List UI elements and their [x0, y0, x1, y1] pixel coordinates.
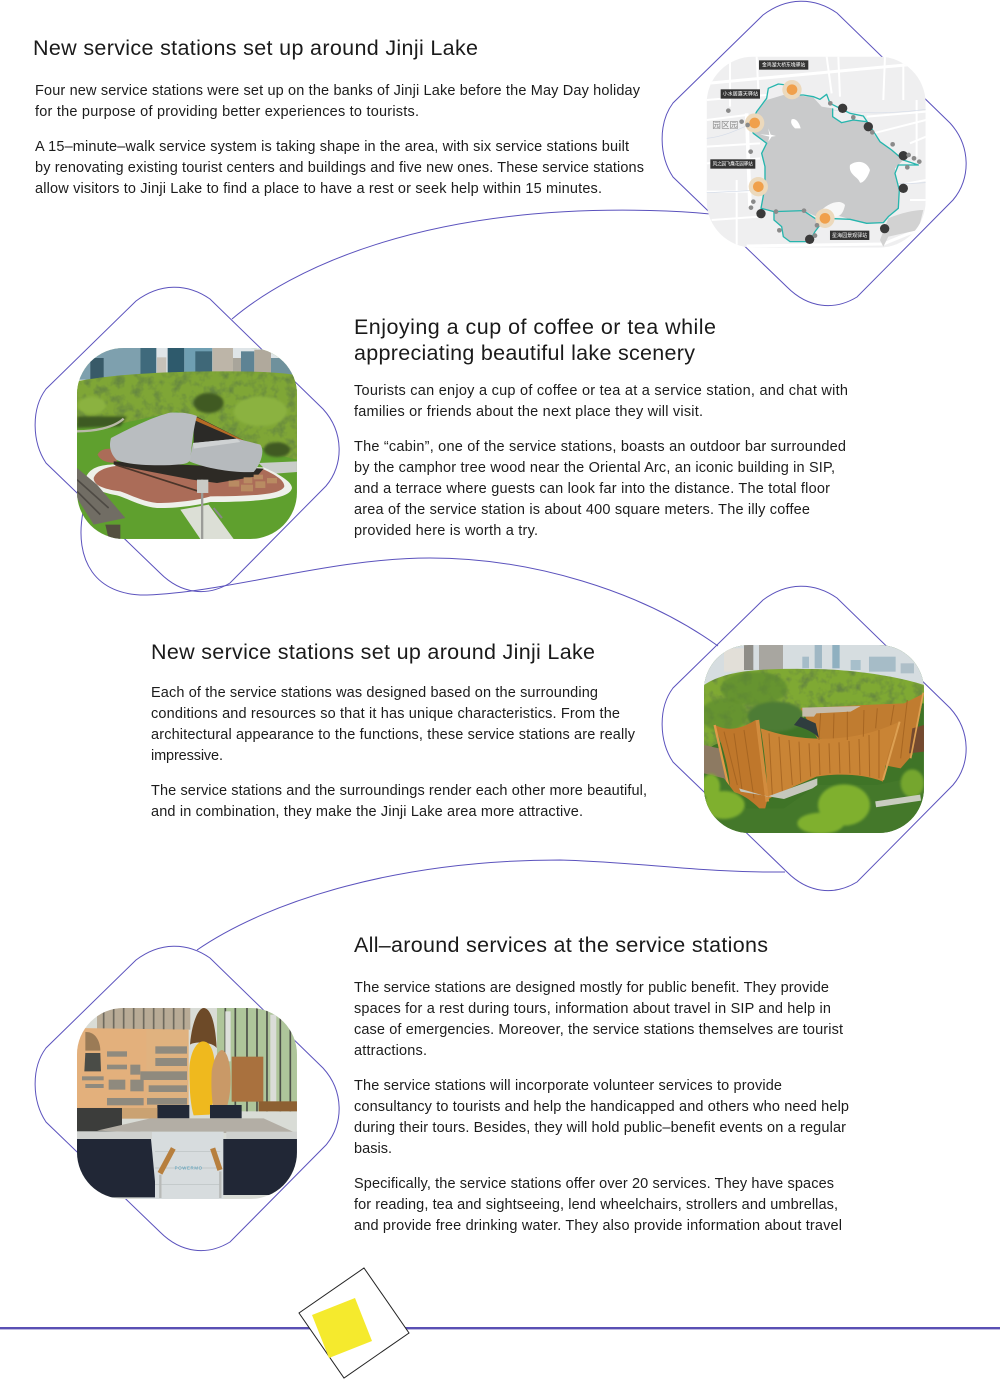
connector curve: cabin to bamboo pavilion: [81, 512, 718, 646]
foreground greens: [701, 769, 924, 834]
footer emblem: tilted square with yellow square: [299, 1268, 409, 1378]
paragraph: [354, 980, 843, 1059]
paragraph: [354, 439, 846, 539]
outline: shop diamond: [35, 946, 339, 1251]
panel: shop interior photo: [77, 1008, 297, 1199]
station labels: 小水居露天驿站: [723, 91, 758, 98]
paragraph: [35, 83, 641, 120]
station labels: 星海园景观驿站: [832, 232, 867, 239]
panel: route map of Jinji Lake: [707, 57, 926, 248]
paragraph: conditions and resources so that it has unique characteristics. From the: [151, 706, 620, 722]
paragraph: basis.: [354, 1141, 392, 1157]
sky and skyline: [704, 645, 924, 685]
paragraph: by the camphor tree wood near the Oriental Arc, an iconic building in SIP,: [354, 460, 835, 476]
heading: appreciating beautiful lake scenery: [354, 341, 695, 365]
back chairs: [157, 1105, 189, 1118]
section 1: map text: [33, 36, 644, 197]
outline: cabin diamond: [35, 287, 339, 592]
paragraph: [35, 139, 644, 197]
paragraph: The service stations are designed mostly for public benefit. They provide: [354, 980, 829, 996]
teal route: [750, 84, 918, 242]
panel: route map of Jinji Lake: 园区园: [712, 120, 738, 130]
paragraph: A 15–minute–walk service system is taking shape in the area, with six service stations built: [35, 139, 629, 155]
section 4: services text: [354, 933, 849, 1234]
paragraph: The service stations and the surroundings render each other more beautiful,: [151, 783, 647, 799]
surfboards: [189, 1008, 263, 1115]
paragraph: Four new service stations were set up on the banks of Jinji Lake before the May Day holiday: [35, 83, 641, 99]
pergola: [77, 468, 125, 525]
paragraph: [354, 1078, 849, 1157]
panel: shop interior photo: POWERMO: [175, 1165, 203, 1170]
paragraph: Each of the service stations was designed based on the surrounding: [151, 685, 598, 701]
canopy: [701, 669, 924, 752]
connector curve: bamboo pavilion to shop: [197, 860, 785, 950]
panel: bamboo pavilion photo: [701, 645, 924, 834]
paragraph: consultancy to tourists and help the handicapped and others who need help: [354, 1099, 849, 1115]
station labels: 金鸡湖大桥东堍驿站: [762, 62, 805, 69]
lake surface: [750, 95, 903, 223]
back building: [801, 693, 924, 768]
paragraph: [151, 685, 636, 764]
paragraph: during their tours. Besides, they will hold public–benefit events on a regular: [354, 1120, 846, 1136]
paragraph: [354, 1176, 842, 1234]
window slats: [97, 1008, 297, 1111]
paragraph: for the purpose of providing better experiences to tourists.: [35, 104, 419, 120]
paragraph: for reading, tea and sightseeing, lend wheelchairs, strollers and umbrellas,: [354, 1197, 838, 1213]
paragraph: by renovating existing tourist centers and buildings and five new ones. These service stations: [35, 160, 644, 176]
paragraph: impressive.: [151, 748, 223, 764]
heading: New service stations set up around Jinji Lake: [151, 640, 595, 664]
front bamboo screens: [715, 720, 767, 813]
connector curve: map to cabin: [232, 210, 710, 319]
paragraph: families or friends about the next place they will visit.: [354, 404, 703, 420]
station labels: 风之园飞鹰花园驿站: [713, 161, 753, 168]
outline: map diamond: [662, 1, 966, 306]
paragraph: The “cabin”, one of the service stations, boasts an outdoor bar surrounded: [354, 439, 846, 455]
paragraph: Specifically, the service stations offer over 20 services. They have spaces: [354, 1176, 834, 1192]
left ground: [704, 745, 726, 782]
section 3: design text: [151, 640, 647, 820]
tree canopy: [77, 371, 297, 460]
paragraph: architectural appearance to the functions, these service stations are really: [151, 727, 636, 743]
footer rule: [0, 1327, 1000, 1329]
paragraph: spaces for a rest during tours, information about travel in SIP and help in: [354, 1001, 831, 1017]
paragraph: case of emergencies. Moreover, the service stations themselves are tourist: [354, 1022, 843, 1038]
paragraph: [354, 383, 848, 420]
heading: All–around services at the service stations: [354, 933, 768, 957]
cabin roof: [194, 416, 247, 443]
sky and towers: [77, 348, 297, 381]
paragraph: and a terrace where guests can look far into the distance. The total floor: [354, 481, 830, 497]
station labels: [710, 60, 869, 240]
pegboard wall: [77, 1028, 189, 1116]
paragraph: Tourists can enjoy a cup of coffee or tea at a service station, and chat with: [354, 383, 848, 399]
pavement under pavilion: [739, 778, 817, 799]
panel: cabin photo: [77, 348, 297, 539]
paragraph: and in combination, they make the Jinji Lake area more attractive.: [151, 804, 583, 820]
heading: Enjoying a cup of coffee or tea while: [354, 315, 716, 339]
section 2: coffee text: [354, 315, 848, 539]
heading: [354, 315, 716, 365]
dark service markers: [756, 104, 908, 244]
outline: pavilion diamond: [662, 586, 966, 891]
tables: [229, 475, 277, 491]
paragraph: area of the service station is about 400 square meters. The illy coffee: [354, 502, 810, 518]
paragraph: allow visitors to Jinji Lake to find a place to have a rest or seek help within 15 minutes.: [35, 181, 602, 197]
paragraph: [151, 783, 647, 820]
terrace: [86, 464, 292, 508]
paragraph: and provide free drinking water. They also provide information about travel: [354, 1218, 842, 1234]
paragraph: provided here is worth a try.: [354, 523, 538, 539]
table: [97, 1118, 294, 1133]
paragraph: attractions.: [354, 1043, 427, 1059]
orange station markers: [745, 80, 835, 228]
walkway and pole: [180, 505, 234, 539]
lawn path: [77, 419, 124, 431]
heading: New service stations set up around Jinji Lake: [33, 36, 478, 60]
paragraph: The service stations will incorporate volunteer services to provide: [354, 1078, 782, 1094]
front chairs: [77, 1139, 155, 1197]
